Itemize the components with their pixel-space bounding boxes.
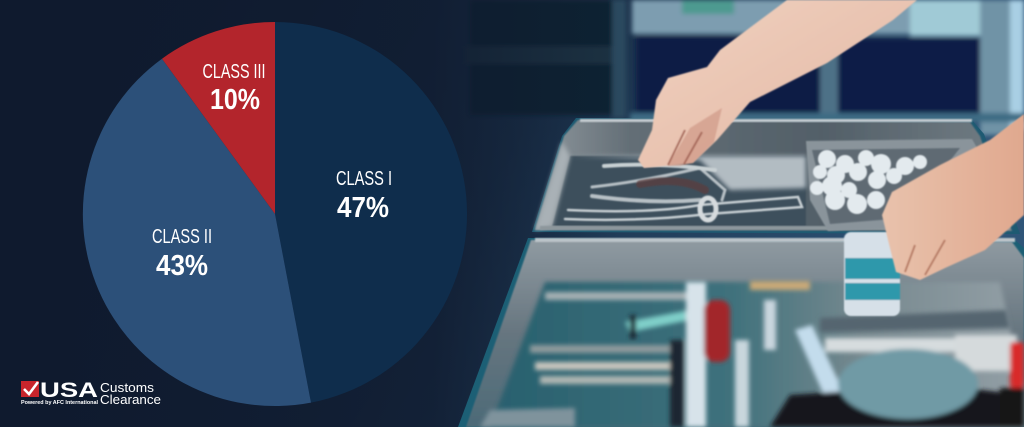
label: Class I — [336, 168, 392, 224]
left dark overlay — [0, 0, 620, 427]
logo: USA Customs Clearance — [21, 378, 161, 407]
label: Class III: CLASS III — [202, 61, 266, 83]
photo: cup with teal stripes — [844, 232, 900, 316]
photo: upper instrument tray — [532, 118, 1020, 234]
photo: lower instrument tray, blurred — [458, 238, 1024, 427]
icon: red check box — [21, 381, 39, 397]
label: Class III — [202, 61, 266, 116]
slice: Class II 43% — [83, 59, 311, 406]
forceps — [565, 165, 802, 220]
slice: Class I 47% — [275, 22, 467, 403]
label: Class I: CLASS I — [336, 168, 392, 190]
label: Class III: 10% — [210, 84, 260, 116]
label: Class II: 43% — [156, 250, 208, 282]
label: Class II — [152, 226, 212, 282]
background: blurred cabinets behind the trays — [465, 0, 1024, 135]
slice: Class III 10% — [162, 22, 275, 214]
label: Class II: CLASS II — [152, 226, 212, 248]
photo: right hand — [882, 114, 1024, 280]
label: Class I: 47% — [337, 192, 389, 224]
photo: left arm and hand — [638, 0, 917, 168]
logo: USA Customs Clearance: Customs — [100, 381, 154, 395]
logo: USA Customs Clearance: USA — [40, 378, 98, 402]
logo: USA Customs Clearance: Powered by AFC International — [21, 400, 99, 406]
logo: USA Customs Clearance: Clearance — [100, 393, 161, 407]
pie chart — [83, 22, 467, 406]
small tray with cotton balls — [806, 139, 984, 231]
